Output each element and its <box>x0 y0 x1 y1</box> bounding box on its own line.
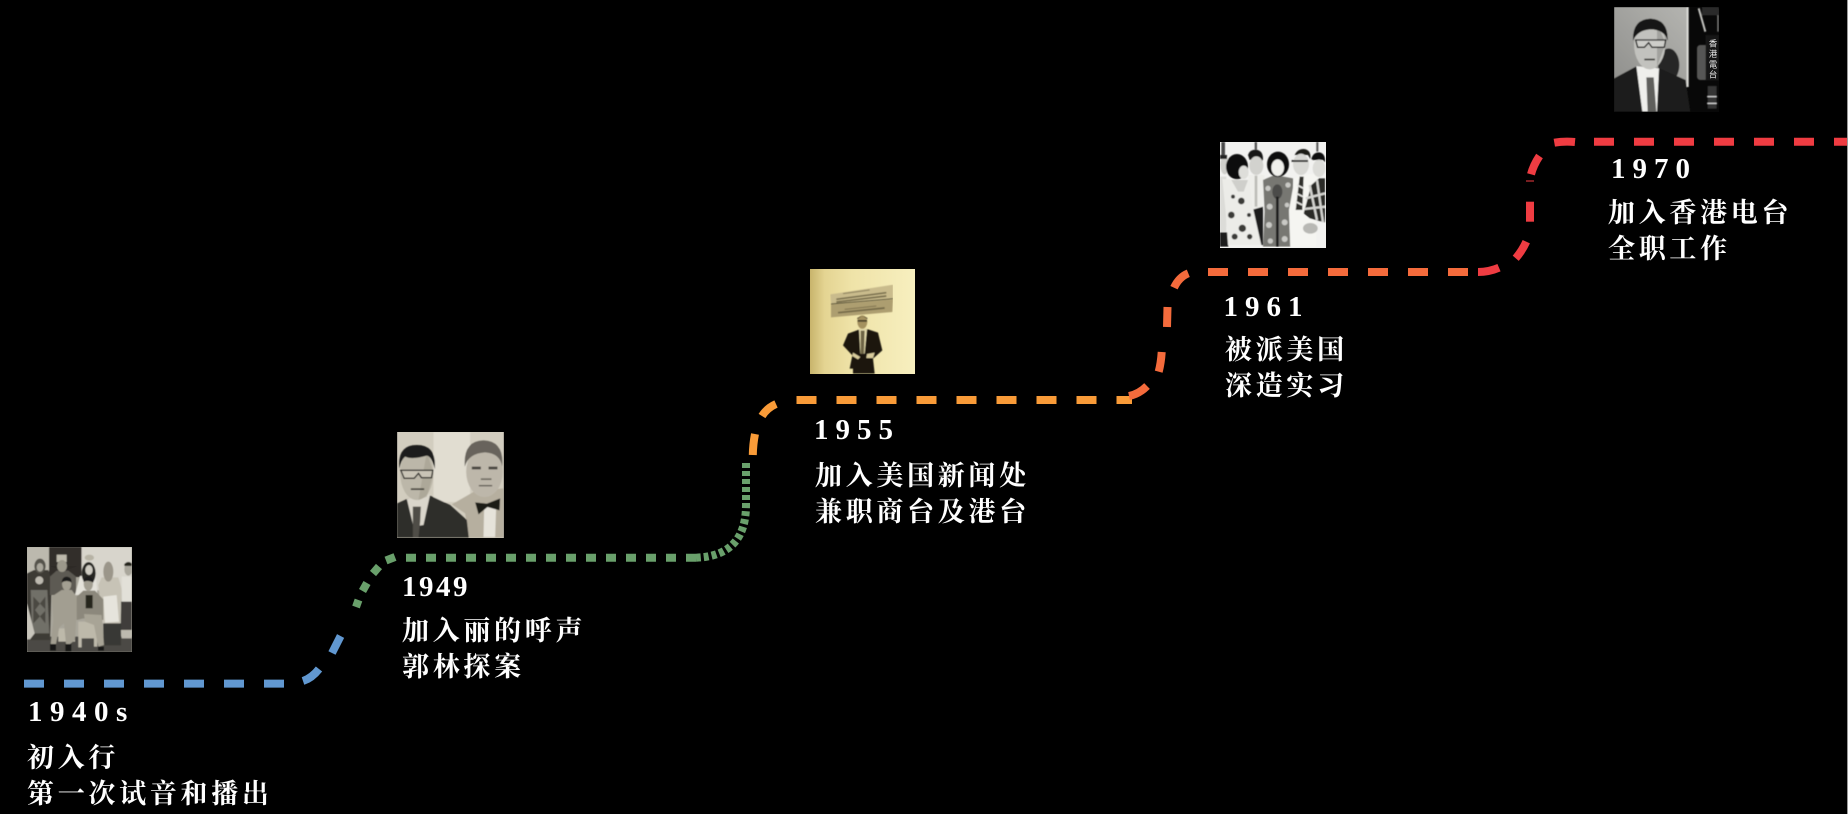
panel: milestone 1970 <box>1608 7 1792 264</box>
description <box>815 460 1030 526</box>
segment: 1955 orange <box>753 400 1132 455</box>
description <box>27 743 273 809</box>
year: 1961: 1961 <box>1224 291 1310 323</box>
description: 兼职商台及港台 <box>815 496 1030 526</box>
description: 被派美国 <box>1225 334 1348 364</box>
description: 郭林探案 <box>402 652 525 682</box>
photo: two men portrait <box>397 432 504 538</box>
description: 加入香港电台 <box>1608 198 1792 228</box>
panel: milestone 1940s <box>27 547 273 809</box>
description: 加入美国新闻处 <box>815 460 1030 490</box>
year: 1955: 1955 <box>814 414 900 446</box>
microphone label: 台 <box>1709 70 1717 80</box>
microphone label: 港 <box>1709 49 1718 59</box>
description <box>402 616 586 682</box>
microphone label: 電 <box>1709 59 1717 69</box>
segment: 1970 red <box>1478 142 1848 272</box>
microphone label: 香 <box>1709 39 1717 49</box>
panel: milestone 1955 <box>810 269 1030 526</box>
year: 1949: 1949 <box>402 571 470 603</box>
description: 全职工作 <box>1608 234 1731 264</box>
year: 1940s: 1940s <box>28 696 135 728</box>
segment: 1940s blue <box>24 636 341 684</box>
description: 加入丽的呼声 <box>402 616 586 646</box>
description <box>1225 334 1348 400</box>
photo: man beneath plaque <box>810 269 915 374</box>
segment: 1949 green <box>356 463 746 607</box>
description: 初入行 <box>27 743 119 773</box>
description: 深造实习 <box>1225 370 1348 400</box>
right edge line <box>1847 0 1848 814</box>
photo: group at microphone <box>1220 142 1326 248</box>
description: 第一次试音和播出 <box>27 779 273 809</box>
panel: milestone 1949 <box>397 432 586 682</box>
photo: opera cast group <box>27 547 132 652</box>
photo: man at radio microphone <box>1614 7 1719 112</box>
panel: milestone 1961 <box>1220 142 1348 400</box>
year: 1970: 1970 <box>1611 153 1697 185</box>
segment: 1961 red-orange <box>1129 272 1468 396</box>
description <box>1608 198 1792 264</box>
